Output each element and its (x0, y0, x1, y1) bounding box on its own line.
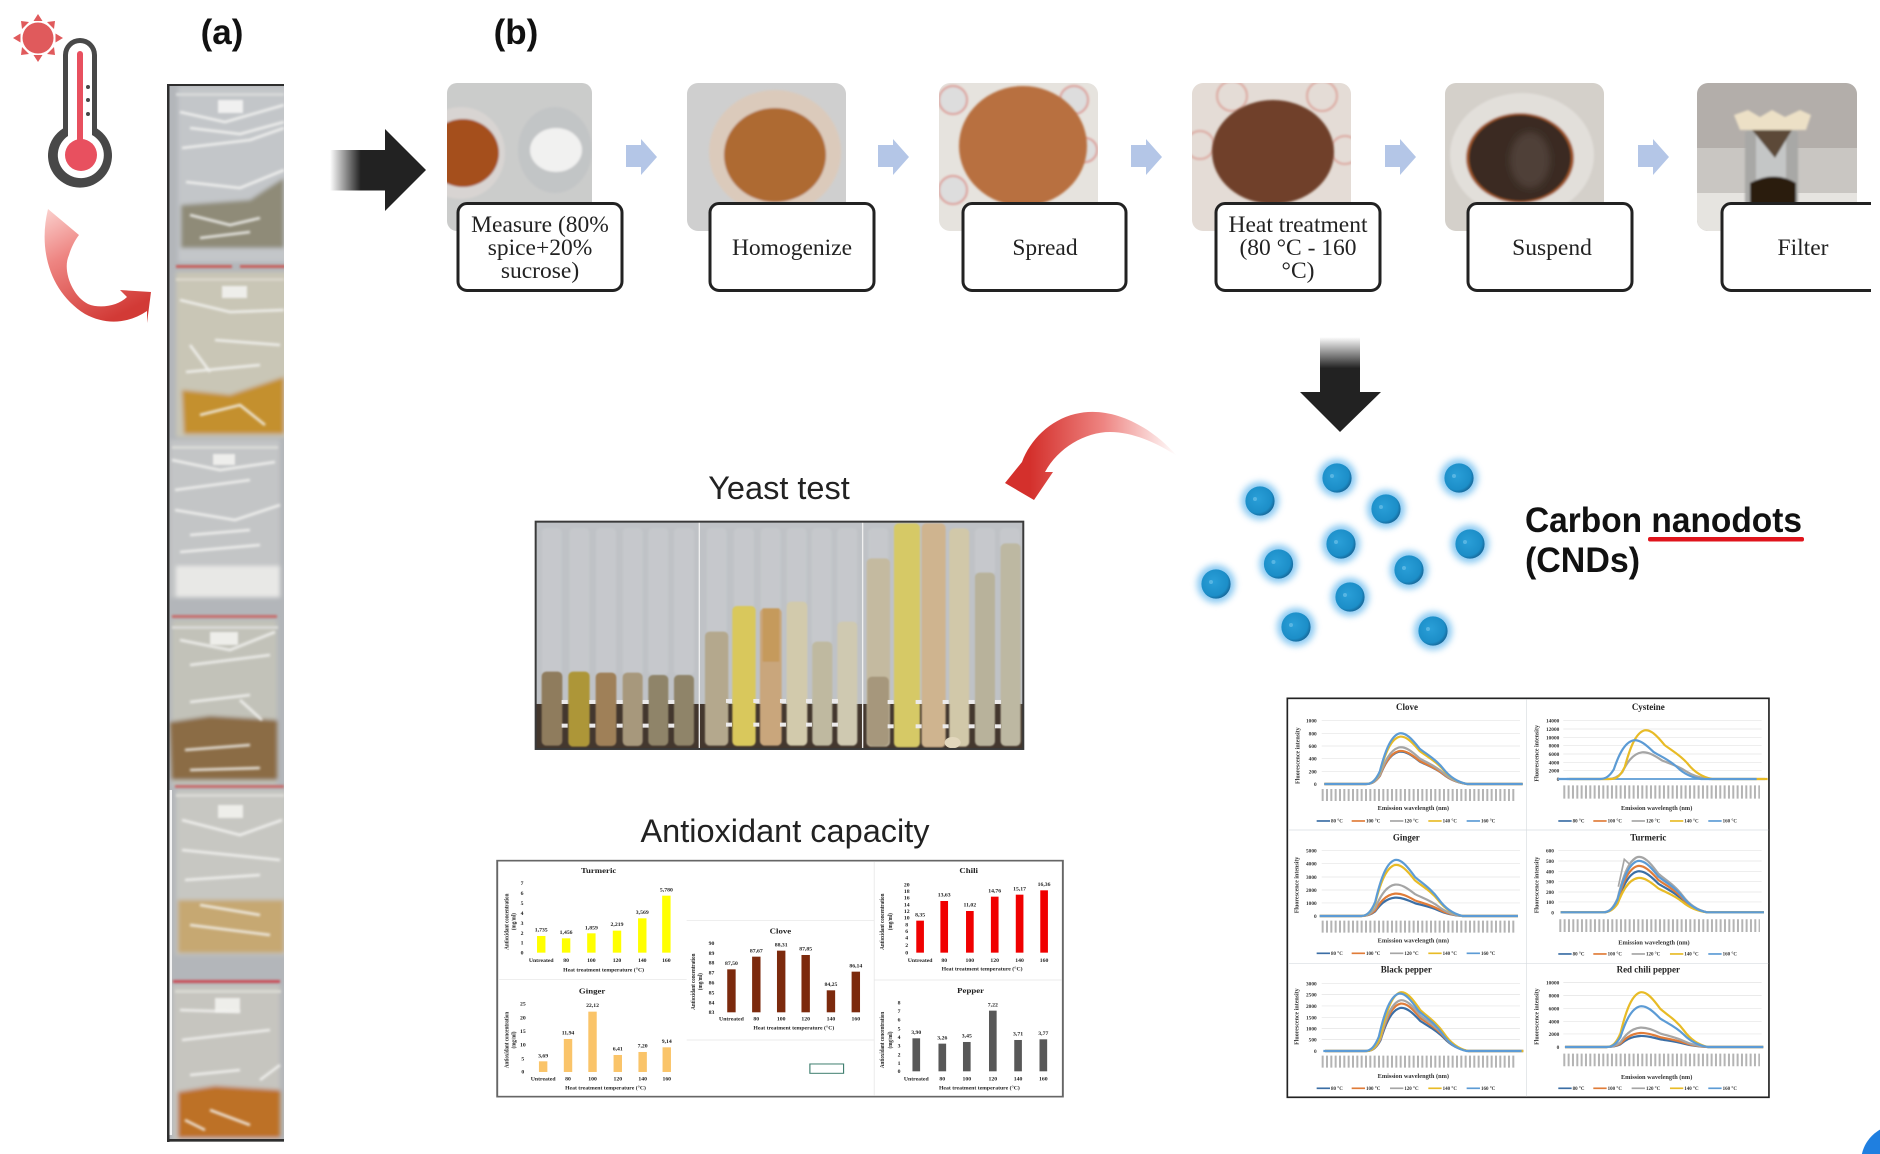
step 6 photo: filter (1697, 83, 1857, 233)
chart: chili: 20 (904, 883, 910, 888)
step box: homogenize (710, 204, 874, 290)
chart: ginger: (mg/ml) (510, 1031, 518, 1048)
arrow: black arrow down to nanodots (1300, 337, 1381, 432)
chart: cysteine spectrum: 14000 (1546, 719, 1560, 725)
chart: ginger: 3,69 (538, 1054, 548, 1059)
chart: chili: 120 (990, 958, 999, 964)
chart: clove: Heat treatment temperature (°C) (753, 1025, 834, 1031)
chart: clove: 89 (709, 951, 715, 957)
chart: ginger: 140 (638, 1077, 647, 1082)
chart: cysteine spectrum: Fluorescence intensity (1534, 725, 1540, 782)
chart: clove: 120 (801, 1017, 810, 1023)
chart: cysteine spectrum: 80 °C (1573, 820, 1585, 825)
arrow: curved red arrow to yeast test (1005, 412, 1177, 500)
step box: filter (1722, 204, 1871, 290)
chart: cysteine spectrum (1534, 702, 1768, 825)
chart: pepper: Untreated (904, 1077, 929, 1082)
chart: pepper: 4 (898, 1035, 901, 1041)
step 3 photo: spread (939, 83, 1098, 231)
chart: chili: 10 (904, 916, 910, 922)
chart: turmeric: 7 (521, 881, 524, 887)
chart: chili: 16 (904, 896, 910, 902)
chart: chili: 8 (905, 923, 908, 928)
chart: turmeric: 2 (521, 931, 524, 937)
chart: ginger: 120 (613, 1077, 622, 1082)
step box: filter: Filter (1778, 235, 1829, 261)
chart: chili: 140 (1015, 958, 1024, 964)
chart: red chili pepper spectrum: 0 (1557, 1045, 1560, 1051)
chart: clove spectrum: 80 °C (1331, 820, 1343, 825)
chart: ginger spectrum: 80 °C (1331, 952, 1343, 957)
step box: spread (963, 204, 1126, 290)
step box: measure: spice+20% (488, 235, 592, 261)
chart: black pepper spectrum: 0 (1314, 1049, 1317, 1055)
label: panel b: (b) (494, 13, 538, 52)
chart: red chili pepper spectrum: Red chili pepper (1617, 965, 1680, 975)
icon: thermometer (48, 38, 112, 188)
chart: ginger: 20 (520, 1016, 526, 1021)
chart: turmeric spectrum (1534, 832, 1764, 958)
chart: black pepper spectrum: 1000 (1306, 1027, 1317, 1033)
chart: pepper: Heat treatment temperature (°C) (939, 1085, 1020, 1092)
chart: pepper: 0 (898, 1069, 901, 1075)
chart: ginger spectrum: 1000 (1306, 901, 1317, 907)
chart: ginger spectrum (1294, 832, 1520, 957)
chart: pepper: 160 (1039, 1077, 1048, 1082)
chart: clove spectrum: 400 (1309, 757, 1317, 763)
chart: pepper: 3,26 (937, 1036, 948, 1041)
step box: heat treatment: (80 °C - 160 (1239, 235, 1357, 261)
chart: turmeric: 160 (662, 958, 671, 964)
arrow: curved red arrow to samples (45, 209, 151, 323)
chart: pepper: 8 (898, 1001, 901, 1006)
chart: cysteine spectrum: 2000 (1549, 769, 1560, 775)
chart: cysteine spectrum: 4000 (1549, 760, 1560, 766)
chart: pepper: 3,71 (1013, 1032, 1023, 1038)
chart: turmeric spectrum: 600 (1546, 849, 1554, 855)
chart: turmeric spectrum: 100 (1546, 900, 1554, 906)
chart: pepper: 80 (939, 1077, 946, 1082)
step box: heat treatment: °C) (1282, 258, 1314, 284)
step box: measure: Measure (80% (471, 212, 609, 238)
icon: sun (13, 14, 63, 62)
chart: clove: (mg/ml) (697, 973, 704, 990)
chart: clove: 88,31 (775, 943, 788, 949)
heading: antioxidant capacity: Antioxidant capacity (640, 813, 930, 849)
chart: ginger: 80 (565, 1077, 571, 1082)
chart: turmeric: Untreated (529, 958, 554, 964)
chart: ginger spectrum: Emission wavelength (nm) (1378, 937, 1449, 944)
chart: ginger spectrum: 2000 (1306, 888, 1317, 894)
chart: turmeric: 80 (563, 958, 569, 964)
chart: clove: Clove (770, 927, 792, 936)
chart: turmeric: 3,569 (636, 910, 649, 916)
chart panel: fluorescence spectra (1287, 698, 1769, 1097)
chart: ginger: Heat treatment temperature (°C) (565, 1085, 646, 1092)
chart: ginger: 7,20 (638, 1044, 648, 1050)
chart: red chili pepper spectrum: 120 °C (1646, 1087, 1661, 1092)
step 1 photo: measure (447, 83, 592, 231)
chart: pepper: 3 (898, 1044, 901, 1050)
chart: clove spectrum: 120 °C (1404, 820, 1419, 825)
step box: homogenize: Homogenize (732, 235, 852, 261)
chart: ginger spectrum: 3000 (1306, 875, 1317, 881)
chart: clove: 87 (709, 971, 715, 976)
chart: turmeric: 1,859 (585, 926, 598, 931)
chart: clove spectrum: Fluorescence intensity (1295, 727, 1301, 784)
chart: clove (691, 927, 863, 1031)
chart: clove spectrum: Clove (1396, 702, 1418, 712)
illustration: carbon nanodots (1197, 459, 1489, 650)
chart: red chili pepper spectrum: 4000 (1549, 1019, 1560, 1025)
chart: black pepper spectrum: 160 °C (1481, 1087, 1496, 1092)
chart: red chili pepper spectrum: 6000 (1549, 1006, 1560, 1012)
chart: ginger: Untreated (531, 1077, 556, 1082)
chart: clove spectrum: 100 °C (1366, 820, 1381, 825)
chart: pepper: Pepper (957, 986, 984, 995)
chart: clove: 86 (709, 981, 715, 986)
label: panel a: (a) (201, 13, 243, 52)
arrow: step 5 to 6 (1638, 139, 1669, 175)
chart: red chili pepper spectrum: 8000 (1549, 994, 1560, 1000)
chart panel: antioxidant bars (497, 861, 1063, 1097)
chart: ginger: 11,94 (562, 1031, 575, 1037)
heading: yeast test: Yeast test (708, 470, 850, 506)
chart: pepper: 3,90 (911, 1030, 922, 1036)
chart: ginger: 6,41 (613, 1047, 623, 1053)
chart: ginger: 0 (521, 1070, 525, 1076)
chart: ginger spectrum: 100 °C (1366, 952, 1381, 957)
chart: chili: 15,17 (1013, 887, 1026, 892)
step box: heat treatment (1216, 204, 1380, 290)
chart: clove: 85 (709, 991, 715, 996)
chart: clove spectrum: 800 (1309, 731, 1317, 737)
chart: turmeric spectrum: 120 °C (1646, 953, 1661, 958)
step 4 photo: heat treatment (1186, 81, 1359, 231)
chart: turmeric spectrum: 100 °C (1608, 953, 1622, 958)
chart: turmeric spectrum: 300 (1546, 880, 1554, 886)
chart: pepper: 1 (898, 1061, 901, 1067)
chart: cysteine spectrum: 6000 (1549, 752, 1560, 758)
chart: chili: 80 (941, 958, 947, 964)
chart: red chili pepper spectrum (1534, 965, 1763, 1092)
label: carbon nanodots: Carbon nanodots (1525, 501, 1802, 540)
chart: chili: 14 (904, 903, 910, 908)
chart: turmeric spectrum: Emission wavelength (nm) (1618, 940, 1690, 947)
chart: clove spectrum: 200 (1309, 769, 1317, 775)
chart: ginger spectrum: 160 °C (1481, 952, 1496, 957)
chart: turmeric spectrum: 80 °C (1573, 953, 1585, 958)
chart: ginger: 160 (662, 1077, 671, 1082)
chart: chili (880, 866, 1051, 973)
chart: chili: 100 (966, 958, 974, 964)
arrow: step 1 to 2 (626, 139, 657, 175)
chart: ginger: Ginger (579, 987, 606, 996)
chart: clove: 84,25 (824, 982, 838, 988)
step 5 photo: suspend (1445, 83, 1604, 231)
chart: red chili pepper spectrum: 160 °C (1723, 1087, 1737, 1092)
chart: turmeric: 5 (521, 901, 524, 907)
chart: pepper: Antioxidant concentration (880, 1012, 886, 1068)
chart: pepper (880, 986, 1049, 1092)
chart: pepper: 3,77 (1038, 1031, 1049, 1037)
chart: ginger spectrum: 140 °C (1443, 952, 1457, 957)
chart: cysteine spectrum: 0 (1557, 777, 1560, 783)
chart: ginger spectrum: Ginger (1393, 832, 1420, 842)
chart: cysteine spectrum: 12000 (1546, 727, 1560, 733)
chart: clove: 87,50 (725, 961, 738, 967)
chart: cysteine spectrum: 100 °C (1608, 820, 1622, 825)
chart: ginger: 15 (520, 1029, 526, 1035)
chart: chili: 16,36 (1038, 882, 1051, 888)
chart: black pepper spectrum: 100 °C (1366, 1087, 1381, 1092)
step box: heat treatment: Heat treatment (1229, 212, 1368, 238)
chart: clove spectrum: 160 °C (1481, 820, 1496, 825)
chart: ginger spectrum: 120 °C (1404, 952, 1419, 957)
chart: black pepper spectrum: Fluorescence intensity (1294, 988, 1300, 1045)
chart: clove spectrum: 0 (1314, 782, 1317, 788)
chart: ginger spectrum: Fluorescence intensity (1294, 857, 1300, 913)
chart: cysteine spectrum: 10000 (1546, 735, 1560, 741)
chart: pepper: (mg/ml) (886, 1031, 894, 1048)
chart: red chili pepper spectrum: 10000 (1546, 981, 1560, 987)
chart: pepper: 2 (898, 1053, 901, 1058)
chart: red chili pepper spectrum: 100 °C (1608, 1087, 1622, 1092)
step 2 photo: homogenize (687, 83, 846, 231)
chart: chili: (mg/ml) (886, 913, 894, 930)
step box: measure: sucrose) (501, 258, 579, 284)
chart: turmeric spectrum: Fluorescence intensity (1534, 857, 1540, 913)
chart: turmeric (504, 866, 673, 973)
chart: pepper: 7 (898, 1009, 901, 1015)
step box: suspend: Suspend (1512, 235, 1592, 261)
chart: turmeric spectrum: 400 (1546, 869, 1554, 875)
chart: ginger: 9,14 (662, 1039, 672, 1045)
chart: ginger: 5 (521, 1057, 525, 1062)
chart: clove spectrum: 1000 (1306, 719, 1317, 725)
chart: black pepper spectrum: Black pepper (1381, 965, 1432, 975)
chart: chili: 12 (904, 909, 910, 915)
chart: turmeric spectrum: 500 (1546, 859, 1554, 865)
label: carbon nanodots (1525, 501, 1804, 580)
chart: chili: 0 (905, 951, 908, 956)
chart: clove: 87,67 (750, 949, 763, 954)
arrow: step 2 to 3 (878, 139, 909, 175)
chart: turmeric spectrum: Turmeric (1630, 832, 1666, 842)
chart: chili: 18 (904, 889, 910, 895)
chart: black pepper spectrum: 120 °C (1404, 1087, 1419, 1092)
chart: clove: 90 (709, 941, 715, 947)
chart: chili: Heat treatment temperature (°C) (942, 966, 1023, 973)
chart: turmeric: Turmeric (581, 866, 617, 875)
chart: ginger: 25 (520, 1002, 526, 1008)
chart: turmeric: 5,780 (660, 888, 673, 893)
arrow: step 3 to 4 (1131, 139, 1162, 175)
label: carbon nanodots: (CNDs) (1525, 541, 1640, 580)
chart: clove: 100 (777, 1017, 786, 1023)
chart: clove: Antioxidant concentration (691, 954, 697, 1010)
chart: turmeric spectrum: 200 (1546, 890, 1554, 896)
chart: chili: Untreated (908, 958, 932, 964)
chart: ginger: 22,12 (586, 1003, 599, 1009)
chart: chili: 11,02 (964, 903, 976, 909)
chart: cysteine spectrum: 140 °C (1684, 820, 1699, 825)
chart: pepper: 100 (962, 1077, 971, 1082)
chart: ginger: Antioxidant concentration (504, 1012, 511, 1068)
chart: turmeric: 2,219 (611, 922, 624, 928)
chart: turmeric spectrum: 160 °C (1723, 953, 1737, 958)
chart: turmeric: 6 (521, 891, 524, 897)
arrow: step 4 to 5 (1385, 139, 1416, 175)
chart: turmeric: 0 (521, 951, 524, 956)
chart: turmeric: Antioxidant concentration (504, 894, 511, 950)
chart: ginger spectrum: 4000 (1306, 862, 1317, 868)
chart: chili: 14,76 (988, 889, 1002, 894)
chart: ginger spectrum: 5000 (1306, 849, 1317, 855)
chart: black pepper spectrum: Emission wavelength (nm) (1378, 1073, 1449, 1080)
chart: pepper: 5 (898, 1027, 901, 1032)
chart: black pepper spectrum: 3000 (1306, 981, 1317, 987)
chart: red chili pepper spectrum: 2000 (1549, 1032, 1560, 1038)
chart: clove: Untreated (719, 1017, 744, 1023)
chart: clove spectrum: 600 (1309, 744, 1317, 750)
chart: chili: 13,63 (938, 893, 951, 899)
chart: clove: 88 (709, 961, 715, 966)
chart: chili: 4 (905, 936, 908, 942)
chart: clove: 80 (753, 1017, 760, 1023)
chart: black pepper spectrum: 140 °C (1443, 1087, 1457, 1092)
chart: ginger: 10 (520, 1043, 526, 1049)
chart: chili: 2 (905, 943, 908, 949)
chart: turmeric: (mg/ml) (510, 913, 518, 930)
chart: black pepper spectrum: 2000 (1306, 1004, 1317, 1010)
chart: red chili pepper spectrum: Emission wavelength (nm) (1621, 1074, 1692, 1081)
chart: ginger: 100 (588, 1077, 597, 1082)
chart: chili: 8,35 (915, 913, 925, 918)
photo: yeast test tubes (536, 522, 1023, 749)
chart: pepper: 120 (989, 1077, 997, 1082)
chart: black pepper spectrum: 500 (1309, 1038, 1317, 1044)
chart: turmeric: 1,456 (560, 930, 573, 936)
chart: turmeric: 100 (587, 958, 596, 964)
step box: measure (458, 204, 622, 290)
chart: pepper: 140 (1014, 1077, 1023, 1082)
chart: turmeric: 120 (613, 958, 622, 964)
chart: clove spectrum: Emission wavelength (nm) (1378, 805, 1449, 812)
chart: turmeric: 1,735 (535, 928, 548, 934)
chart: cysteine spectrum: Cysteine (1632, 702, 1665, 712)
chart: clove spectrum (1295, 702, 1523, 825)
chart: black pepper spectrum: 2500 (1306, 993, 1317, 999)
chart: clove: 140 (827, 1017, 836, 1023)
chart: black pepper spectrum: 80 °C (1331, 1087, 1343, 1092)
step box: spread: Spread (1012, 235, 1078, 261)
chart: black pepper spectrum (1294, 965, 1523, 1092)
chart: chili: Antioxidant concentration (880, 894, 886, 950)
chart: clove: 87,85 (799, 947, 812, 953)
chart: pepper: 7,22 (988, 1003, 998, 1008)
chart: ginger (504, 987, 672, 1092)
chart: pepper: 6 (898, 1018, 901, 1024)
chart: clove spectrum: 140 °C (1443, 820, 1457, 825)
chart: cysteine spectrum: 8000 (1549, 744, 1560, 750)
chart: clove: 83 (709, 1010, 715, 1016)
chart: chili: 6 (905, 929, 908, 935)
chart: clove: 86,14 (849, 964, 863, 969)
chart: cysteine spectrum: Emission wavelength (nm) (1621, 805, 1692, 812)
chart: chili: 160 (1040, 958, 1049, 964)
photo strip: spice bags (167, 84, 288, 1142)
chart: red chili pepper spectrum: 140 °C (1684, 1087, 1699, 1092)
chart: pepper: 3,45 (962, 1034, 972, 1040)
chart: cysteine spectrum: 120 °C (1646, 820, 1661, 825)
chart: chili: Chili (959, 866, 979, 875)
chart: turmeric: 1 (521, 941, 524, 947)
chart: turmeric: 3 (521, 921, 524, 927)
chart: turmeric spectrum: 140 °C (1684, 953, 1699, 958)
chart: ginger spectrum: 0 (1314, 914, 1317, 920)
chart: turmeric spectrum: 0 (1551, 910, 1554, 916)
chart: red chili pepper spectrum: 80 °C (1573, 1087, 1585, 1092)
chart: clove: 84 (709, 1001, 715, 1006)
chart: turmeric: 4 (521, 911, 524, 917)
chart: red chili pepper spectrum: Fluorescence intensity (1534, 988, 1540, 1045)
chart: turmeric: Heat treatment temperature (°C) (563, 967, 644, 973)
corner: blue badge fragment (1861, 1125, 1880, 1154)
step box: suspend (1468, 204, 1632, 290)
chart: black pepper spectrum: 1500 (1306, 1015, 1317, 1021)
arrow: big black arrow to process (330, 129, 426, 211)
chart: cysteine spectrum: 160 °C (1723, 820, 1737, 825)
chart: turmeric: 140 (638, 958, 647, 964)
chart: clove: 160 (852, 1017, 860, 1023)
